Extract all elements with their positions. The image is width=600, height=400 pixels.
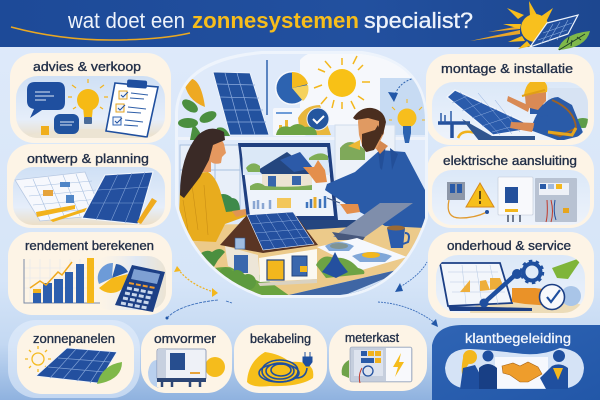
person: woman (178, 129, 250, 242)
icon: speech bubble small (54, 114, 79, 134)
icon: cable coil (247, 352, 313, 386)
panel: onderhoud & service (428, 232, 594, 326)
ruler (36, 205, 87, 222)
solar panel (446, 90, 524, 134)
icon: clock (540, 284, 564, 310)
icon: pie chart (275, 71, 309, 105)
panel: bekabeling (234, 325, 327, 393)
heading: bekabeling (250, 331, 311, 346)
icon: calculator (115, 265, 165, 312)
house model (197, 212, 364, 297)
icon: hand (512, 288, 542, 306)
blueprint sheet (15, 172, 103, 221)
arrow: blue right (395, 262, 427, 292)
desk (178, 222, 425, 297)
icon: leaf (97, 362, 122, 384)
illustration: maintenance (436, 255, 585, 313)
roof solar panel (247, 212, 314, 250)
illustration: handshake (445, 348, 584, 389)
heading: montage & installatie (441, 61, 573, 76)
heading: omvormer (154, 331, 217, 346)
icon: light bulb (389, 99, 425, 143)
heading: zonnepanelen (33, 331, 115, 346)
icon: warning triangle (466, 183, 494, 207)
title: specialist? (364, 8, 473, 33)
fuse box (447, 182, 465, 200)
illustration: design (13, 167, 165, 225)
hand pointing (303, 160, 327, 183)
illustration: electrical (432, 170, 590, 225)
icon: meter cabinet (342, 347, 412, 383)
panel: meterkast (329, 325, 427, 391)
icon: house on screen (246, 152, 328, 190)
heading: onderhoud & service (447, 238, 571, 253)
icon: check badge (273, 105, 331, 136)
heading: meterkast (345, 330, 399, 345)
meter unit (535, 178, 577, 222)
header band (0, 0, 600, 47)
panel: rendement berekenen (8, 232, 172, 315)
panel: klantbegeleiding (432, 325, 600, 400)
icon: wall solar panel (213, 72, 269, 135)
heading: advies & verkoop (33, 59, 141, 74)
title: zonnesystemen (192, 8, 359, 33)
heading: rendement berekenen (25, 238, 154, 253)
central scene (175, 50, 428, 298)
computer monitor (238, 143, 338, 220)
icon: light bulb (68, 79, 108, 124)
icon: checklist clipboard (106, 79, 158, 137)
icon: coffee mug (387, 226, 409, 248)
heading: ontwerp & planning (27, 151, 149, 166)
panel: ontwerp & planning (7, 144, 171, 228)
icon: handshake hands (502, 362, 542, 382)
icon: wrench (485, 276, 514, 302)
rack tools (438, 123, 470, 138)
title: wat doet een (67, 8, 185, 33)
icon: check mark (552, 260, 580, 279)
panel: zonnepanelen (8, 320, 140, 398)
laptop (332, 203, 413, 240)
window shelf (180, 145, 240, 215)
solar panel (82, 172, 153, 224)
pencil (137, 198, 157, 224)
plant (178, 97, 230, 140)
arrow: yellow dotted left (174, 266, 218, 297)
illustration: installer (432, 82, 588, 140)
pie chart (98, 263, 128, 293)
panel: omvormer (141, 325, 232, 393)
icon: header sun with solar panel and leaf (470, 1, 590, 50)
panel: advies & verkoop (10, 53, 171, 149)
person: man (303, 108, 425, 228)
report papers (317, 238, 407, 270)
icon: gear (524, 264, 540, 280)
sky cloud (300, 54, 412, 125)
laptop (440, 263, 512, 306)
heading: klantbegeleiding (465, 331, 571, 346)
illustration: advice (16, 76, 165, 138)
bush (276, 124, 317, 135)
icon: inverter (148, 349, 225, 388)
heading: elektrische aansluiting (443, 153, 577, 168)
arrow: blue bottom right (378, 302, 438, 327)
icon: sun (314, 56, 370, 109)
panel: elektrische aansluiting (427, 146, 594, 228)
icon: speech bubble large (27, 82, 65, 118)
bar chart (24, 258, 100, 303)
installer figure (507, 79, 584, 141)
dashboard charts (254, 200, 270, 209)
inverter (498, 177, 533, 215)
plant behind woman (218, 194, 240, 218)
arrow: blue left (166, 300, 232, 320)
icon: sun outline (25, 346, 51, 372)
icon: solar panel (36, 348, 117, 383)
leaf (184, 79, 205, 107)
panel: montage & installatie (426, 54, 594, 145)
circular arrow (394, 78, 415, 98)
